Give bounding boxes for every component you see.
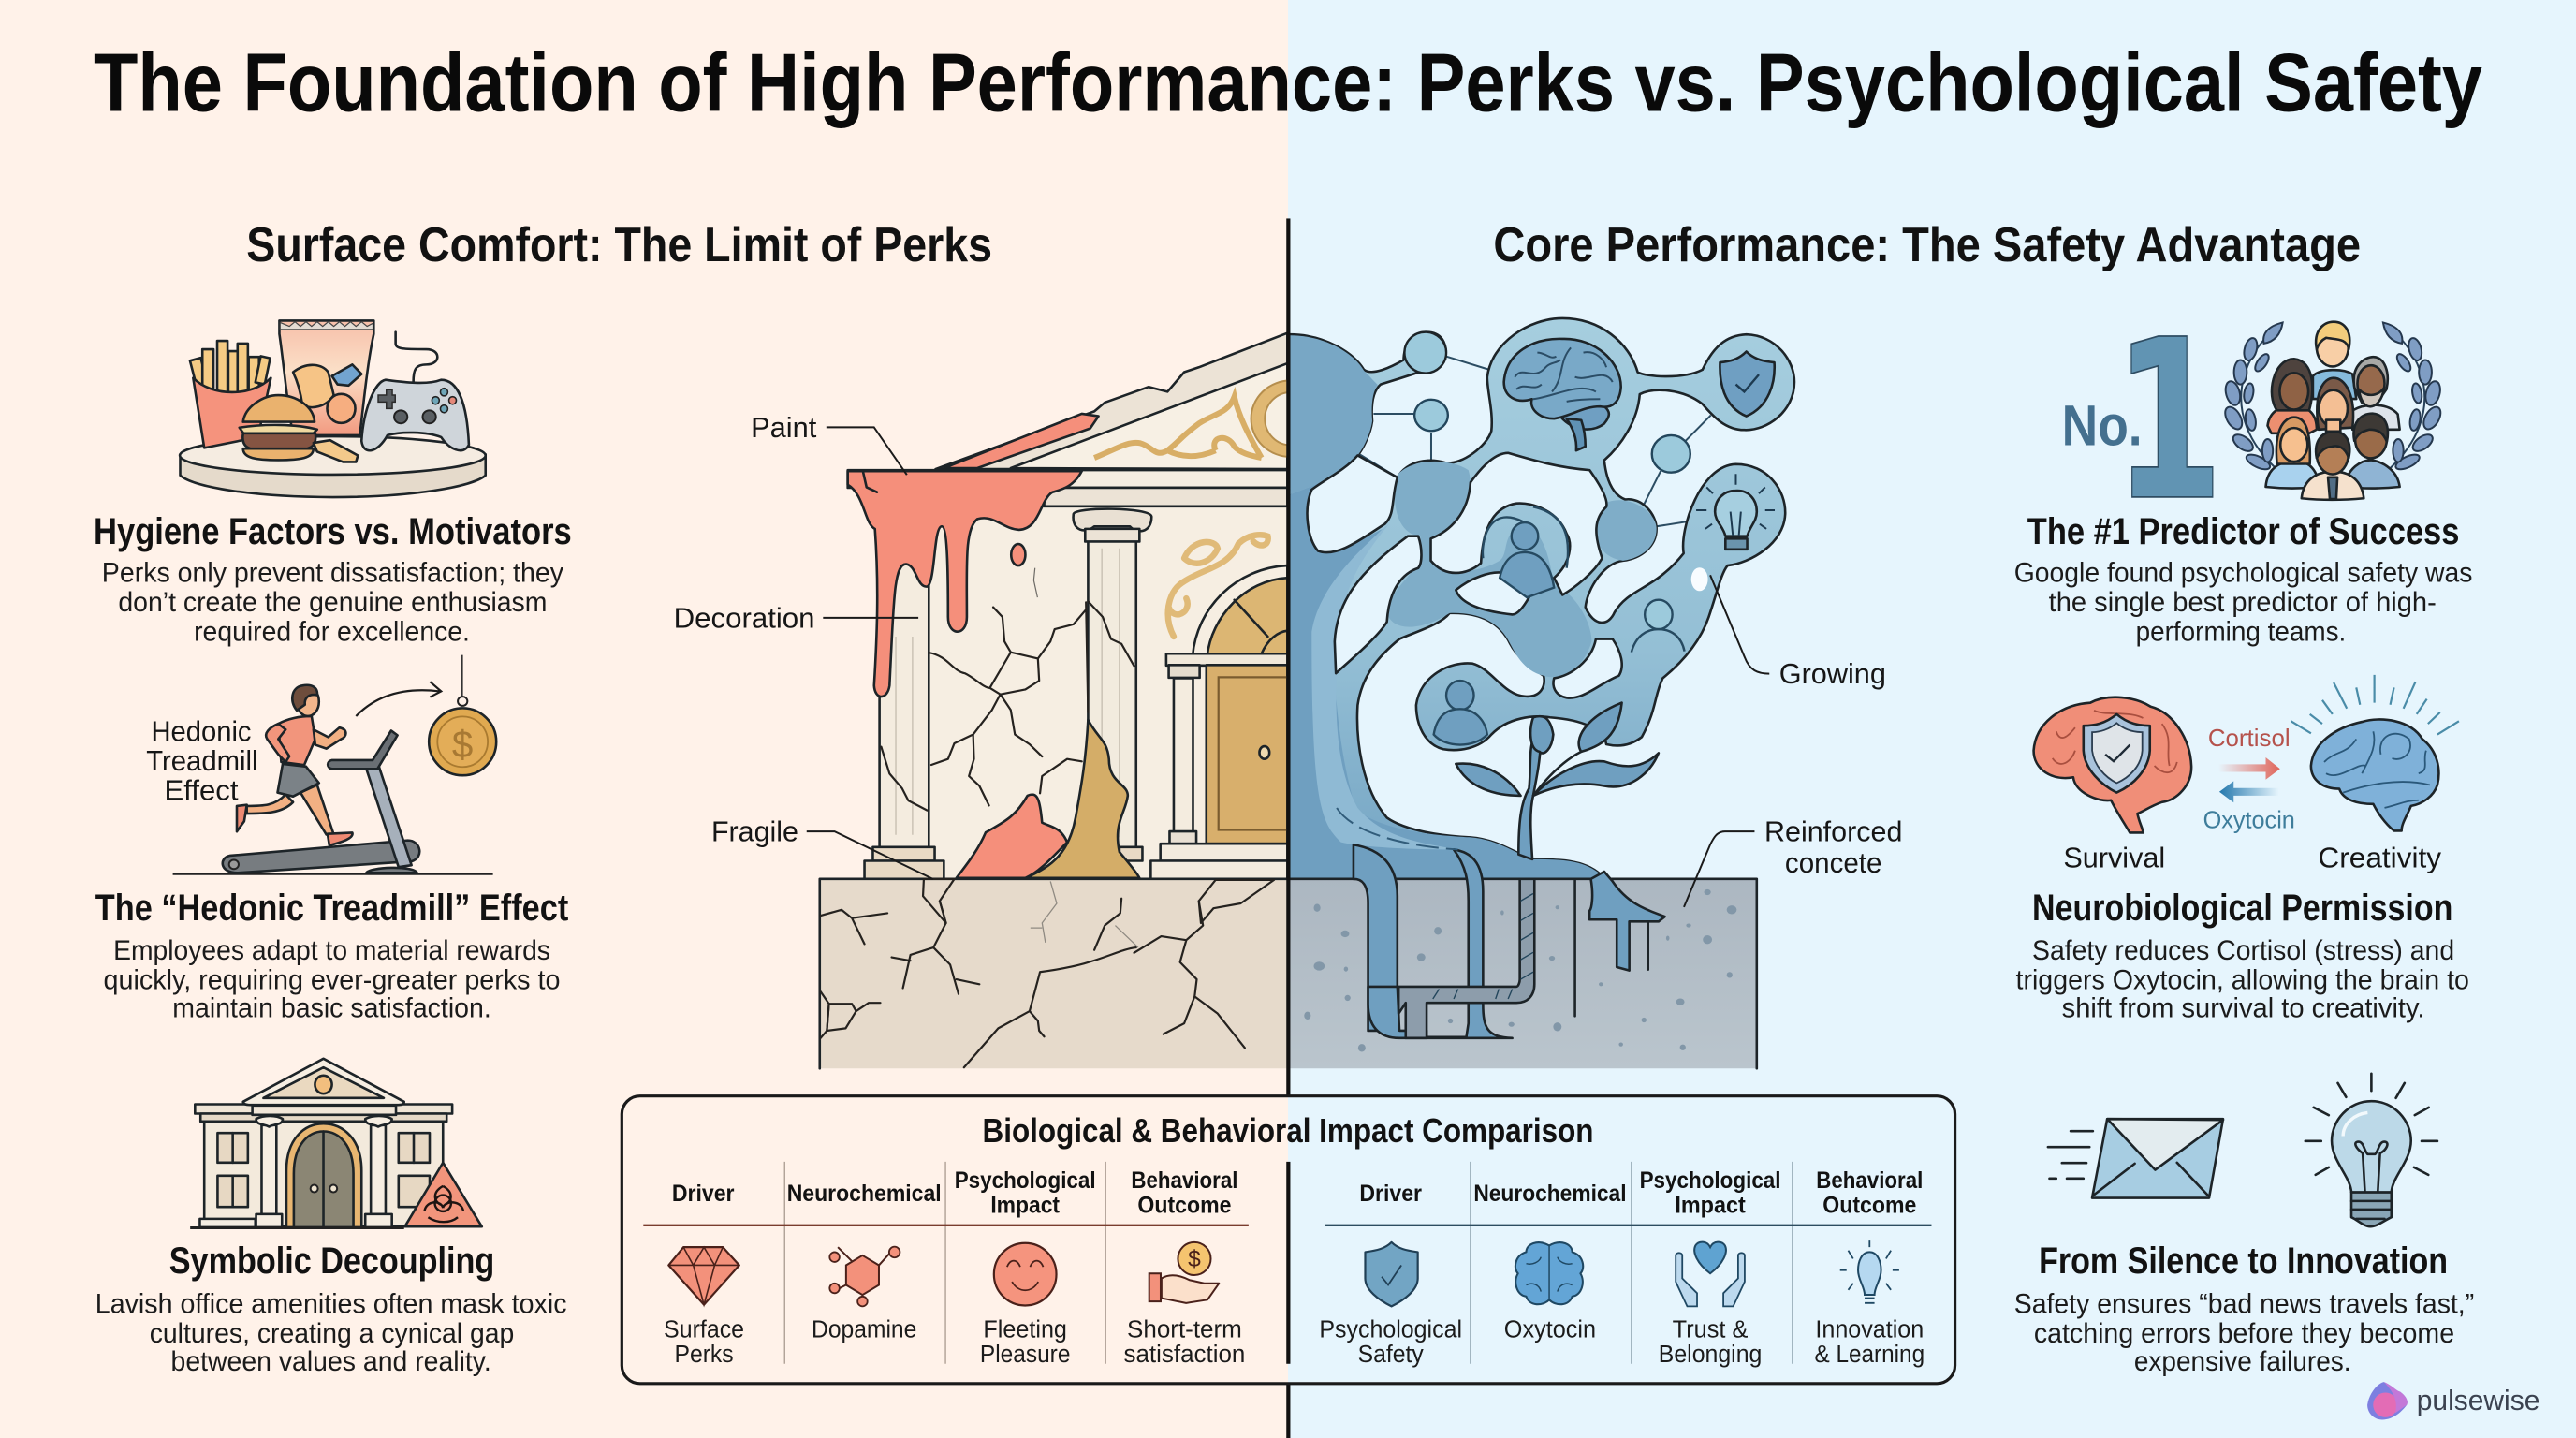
cracked foundation (820, 879, 1287, 1068)
comparison table (622, 1096, 1955, 1384)
small top node (1404, 332, 1446, 374)
text: hedonic treadmill: Employees adapt to material rewards (113, 935, 550, 966)
back row people (2268, 322, 2400, 433)
table headers: perks: Outcome (1137, 1193, 1231, 1218)
label: creativity: Creativity (2318, 842, 2442, 874)
text: symbolic decoupling: Lavish office amenities often mask toxic (95, 1288, 567, 1319)
callout: reinforced concrete: Reinforced (1764, 815, 1902, 848)
table rules (643, 1162, 1931, 1364)
text: hedonic treadmill: quickly, requiring ever-greater perks to (104, 965, 560, 996)
table labels: safety: Innovation (1815, 1315, 1924, 1343)
reinforced concrete block (1290, 879, 1757, 1068)
creativity brain with rays (2291, 675, 2459, 830)
background: perks side (0, 0, 1288, 1438)
callout: growing: Growing (1779, 657, 1886, 690)
heading: neurobiological permission: Neurobiological Permission (2032, 888, 2452, 929)
left column (865, 563, 944, 879)
branch holes (1308, 453, 1622, 698)
table headers: safety: Psychological (1640, 1168, 1781, 1194)
arched doorway (1150, 565, 1287, 879)
text: silence to innovation: catching errors before they become (2034, 1318, 2454, 1349)
text: neurobiological permission: shift from survival to creativity. (2062, 992, 2425, 1023)
panel: hygiene factors (94, 320, 572, 648)
upper trunk mass (1291, 335, 1378, 494)
table headers: safety (1359, 1168, 1923, 1218)
dark lower trunk (1291, 480, 1665, 921)
text: number one predictor (2014, 557, 2472, 648)
table frame (622, 1096, 1955, 1384)
icon: innovation bulb (1840, 1240, 1899, 1303)
front row people (2266, 414, 2400, 500)
right column (1074, 509, 1151, 860)
treadmill (223, 841, 419, 873)
icon: No. 1 numeral: No. (2062, 394, 2143, 459)
table title: Biological & Behavioral Impact Comparison (983, 1111, 1593, 1150)
callout: decoration: Decoration (674, 601, 815, 634)
table headers: perks: Behavioral (1131, 1168, 1237, 1194)
callout: growing (1710, 575, 1886, 690)
hazard triangle (405, 1163, 482, 1226)
label: cortisol: Cortisol (2208, 726, 2291, 752)
icon: hands holding heart (1676, 1242, 1745, 1306)
panel: neurobiological permission (2016, 675, 2469, 1023)
paint drips (848, 471, 1082, 697)
icon: speeding envelope (2048, 1119, 2223, 1198)
runner (300, 785, 334, 835)
label: hedonic treadmill effect: Treadmill (146, 744, 258, 777)
icon: coin in open hand (1149, 1242, 1219, 1303)
logo mark (2367, 1382, 2408, 1419)
label: oxytocin: Oxytocin (2203, 808, 2295, 834)
heading: surface comfort: Surface Comfort: The Limit of Perks (246, 217, 992, 271)
table headers: safety: Neurochemical (1473, 1181, 1627, 1207)
text: neurobiological permission (2016, 935, 2469, 1023)
icon: smiling face (994, 1243, 1057, 1305)
panel: silence to innovation (2014, 1074, 2474, 1377)
table headers: perks: Impact (990, 1193, 1060, 1218)
middle person (2317, 378, 2353, 432)
icon: oxytocin brain (1515, 1242, 1583, 1304)
hanging coin (461, 655, 463, 697)
icon: grand building with hazard sign (190, 1059, 482, 1228)
table headers: safety: Impact (1675, 1193, 1746, 1218)
thin connector lines (1355, 357, 1711, 592)
table labels: safety: Safety (1358, 1340, 1425, 1368)
wall cracks (881, 568, 1134, 811)
building walls (929, 506, 1289, 879)
heading: hygiene factors: Hygiene Factors vs. Motivators (94, 511, 572, 552)
table labels: perks: Dopamine (812, 1315, 916, 1343)
table labels: safety (1319, 1315, 1925, 1368)
table labels: safety: & Learning (1815, 1340, 1925, 1368)
illustration: cracked painted building (820, 333, 1330, 1068)
text: neurobiological permission: Safety reduces Cortisol (stress) and (2032, 935, 2454, 966)
center divider (1286, 218, 1290, 1438)
text: silence to innovation (2014, 1288, 2474, 1377)
table labels: perks: Short-term (1127, 1315, 1242, 1343)
table labels: perks: Pleasure (980, 1340, 1070, 1368)
table labels: safety: Trust & (1673, 1315, 1749, 1343)
icon: No. 1 numeral: 1 (2115, 294, 2223, 549)
icon: shield node (1720, 352, 1775, 417)
right laurel (2383, 322, 2444, 473)
text: hedonic treadmill (104, 935, 560, 1023)
text: symbolic decoupling (95, 1288, 567, 1377)
table headers: perks: Psychological (955, 1168, 1096, 1194)
panel: number one predictor (2014, 294, 2472, 648)
table labels: perks: Fleeting (983, 1315, 1067, 1343)
burger (243, 395, 315, 422)
windows (217, 1133, 430, 1207)
table headers: safety: Driver (1359, 1181, 1422, 1207)
icon: diamond (668, 1247, 739, 1305)
callout: fragile (711, 815, 933, 879)
text: number one predictor: the single best predictor of high- (2049, 587, 2437, 618)
snack bag (279, 320, 373, 435)
game controller (396, 332, 437, 382)
background: safety side (1288, 0, 2576, 1438)
icon: small nodes (1414, 400, 1690, 473)
coin dollar sign: $ (452, 723, 473, 766)
text: symbolic decoupling: between values and reality. (171, 1346, 491, 1377)
text: hygiene factors: Perks only prevent dissatisfaction; they (102, 557, 564, 588)
table headers: perks: Neurochemical (787, 1181, 942, 1207)
icon: runner on treadmill chasing coin (173, 655, 496, 874)
heading: silence to innovation: From Silence to Innovation (2039, 1240, 2448, 1282)
heading: hedonic treadmill: The “Hedonic Treadmill” Effect (95, 888, 568, 929)
table headers: safety: Outcome (1822, 1193, 1916, 1218)
reach arrow (356, 682, 441, 716)
table labels: safety: Psychological (1319, 1315, 1462, 1343)
sprout with leaves (1456, 703, 1659, 859)
table labels: safety: Oxytocin (1504, 1315, 1596, 1343)
callout: paint: Paint (751, 411, 817, 444)
icon: check shield (1365, 1242, 1418, 1306)
icon: person nodes (1434, 506, 1685, 745)
text: hygiene factors (102, 557, 564, 648)
text: neurobiological permission: triggers Oxytocin, allowing the brain to (2016, 965, 2469, 996)
icon: coin in open hand: $ (1188, 1247, 1201, 1272)
table labels: perks (664, 1315, 1245, 1368)
text: symbolic decoupling: cultures, creating a cynical gap (150, 1318, 514, 1349)
logo: pulsewise (2367, 1382, 2539, 1419)
callout: reinforced concrete (1684, 815, 1902, 907)
heading: number one predictor: The #1 Predictor of Success (2027, 511, 2459, 552)
logo wordmark: pulsewise (2417, 1384, 2539, 1416)
growing tip highlight (1691, 567, 1708, 591)
text: silence to innovation: expensive failures. (2134, 1346, 2351, 1377)
table labels: perks: satisfaction (1123, 1340, 1245, 1368)
mid blue branch nodes (1387, 462, 1657, 677)
icon: team inside laurel (2222, 322, 2444, 500)
table labels: perks: Surface (664, 1315, 744, 1343)
icon: No. 1 numeral (2062, 294, 2223, 549)
icon: brain node (1504, 339, 1621, 450)
heading: core performance: Core Performance: The Safety Advantage (1493, 217, 2361, 271)
icon: lightbulb node (1696, 474, 1775, 550)
callout: fragile: Fragile (711, 815, 798, 848)
label: survival: Survival (2063, 842, 2165, 874)
text: number one predictor: Google found psychological safety was (2014, 557, 2472, 588)
entablature (848, 470, 1287, 506)
pediment and roof (935, 333, 1330, 469)
tree canopy silhouette (1290, 318, 1794, 921)
table labels: perks: Perks (674, 1340, 734, 1368)
illustration: growing tree network (1290, 318, 1794, 1068)
fries (190, 341, 271, 394)
label: hedonic treadmill effect: Hedonic (151, 715, 252, 748)
label: hedonic treadmill effect: Effect (165, 774, 239, 807)
text: hedonic treadmill: maintain basic satisfaction. (172, 992, 491, 1023)
heading: symbolic decoupling: Symbolic Decoupling (169, 1240, 494, 1282)
icon: glowing light bulb (2305, 1074, 2437, 1226)
table headers: perks: Driver (672, 1181, 735, 1207)
columns (199, 1116, 392, 1227)
icon: dopamine molecule (829, 1247, 900, 1306)
light trunk band (1311, 524, 1458, 849)
text: hygiene factors: required for excellence. (194, 617, 470, 648)
icon: perks platter (180, 320, 486, 497)
ornament (1168, 535, 1268, 637)
callout: reinforced concrete: concete (1785, 846, 1881, 879)
text: silence to innovation: Safety ensures “bad news travels fast,” (2014, 1288, 2474, 1319)
text: hygiene factors: don’t create the genuine enthusiasm (118, 587, 547, 618)
red and gold peeling patches (957, 720, 1139, 878)
arched door (286, 1123, 361, 1227)
left laurel (2222, 322, 2283, 473)
root contour (1337, 808, 1458, 849)
table headers: perks (672, 1168, 1237, 1218)
panel: symbolic decoupling (95, 1059, 567, 1377)
callout: paint (751, 411, 907, 475)
label: hedonic treadmill effect (146, 715, 258, 807)
table headers: safety: Behavioral (1816, 1168, 1923, 1194)
roots in concrete (1354, 844, 1665, 1038)
survival brain with shield (2034, 697, 2191, 832)
icon: survival brain and creativity brain (2034, 675, 2459, 832)
exchange arrows (2218, 757, 2280, 802)
text: number one predictor: performing teams. (2136, 617, 2346, 648)
panel: hedonic treadmill (95, 655, 568, 1023)
table labels: safety: Belonging (1659, 1340, 1762, 1368)
